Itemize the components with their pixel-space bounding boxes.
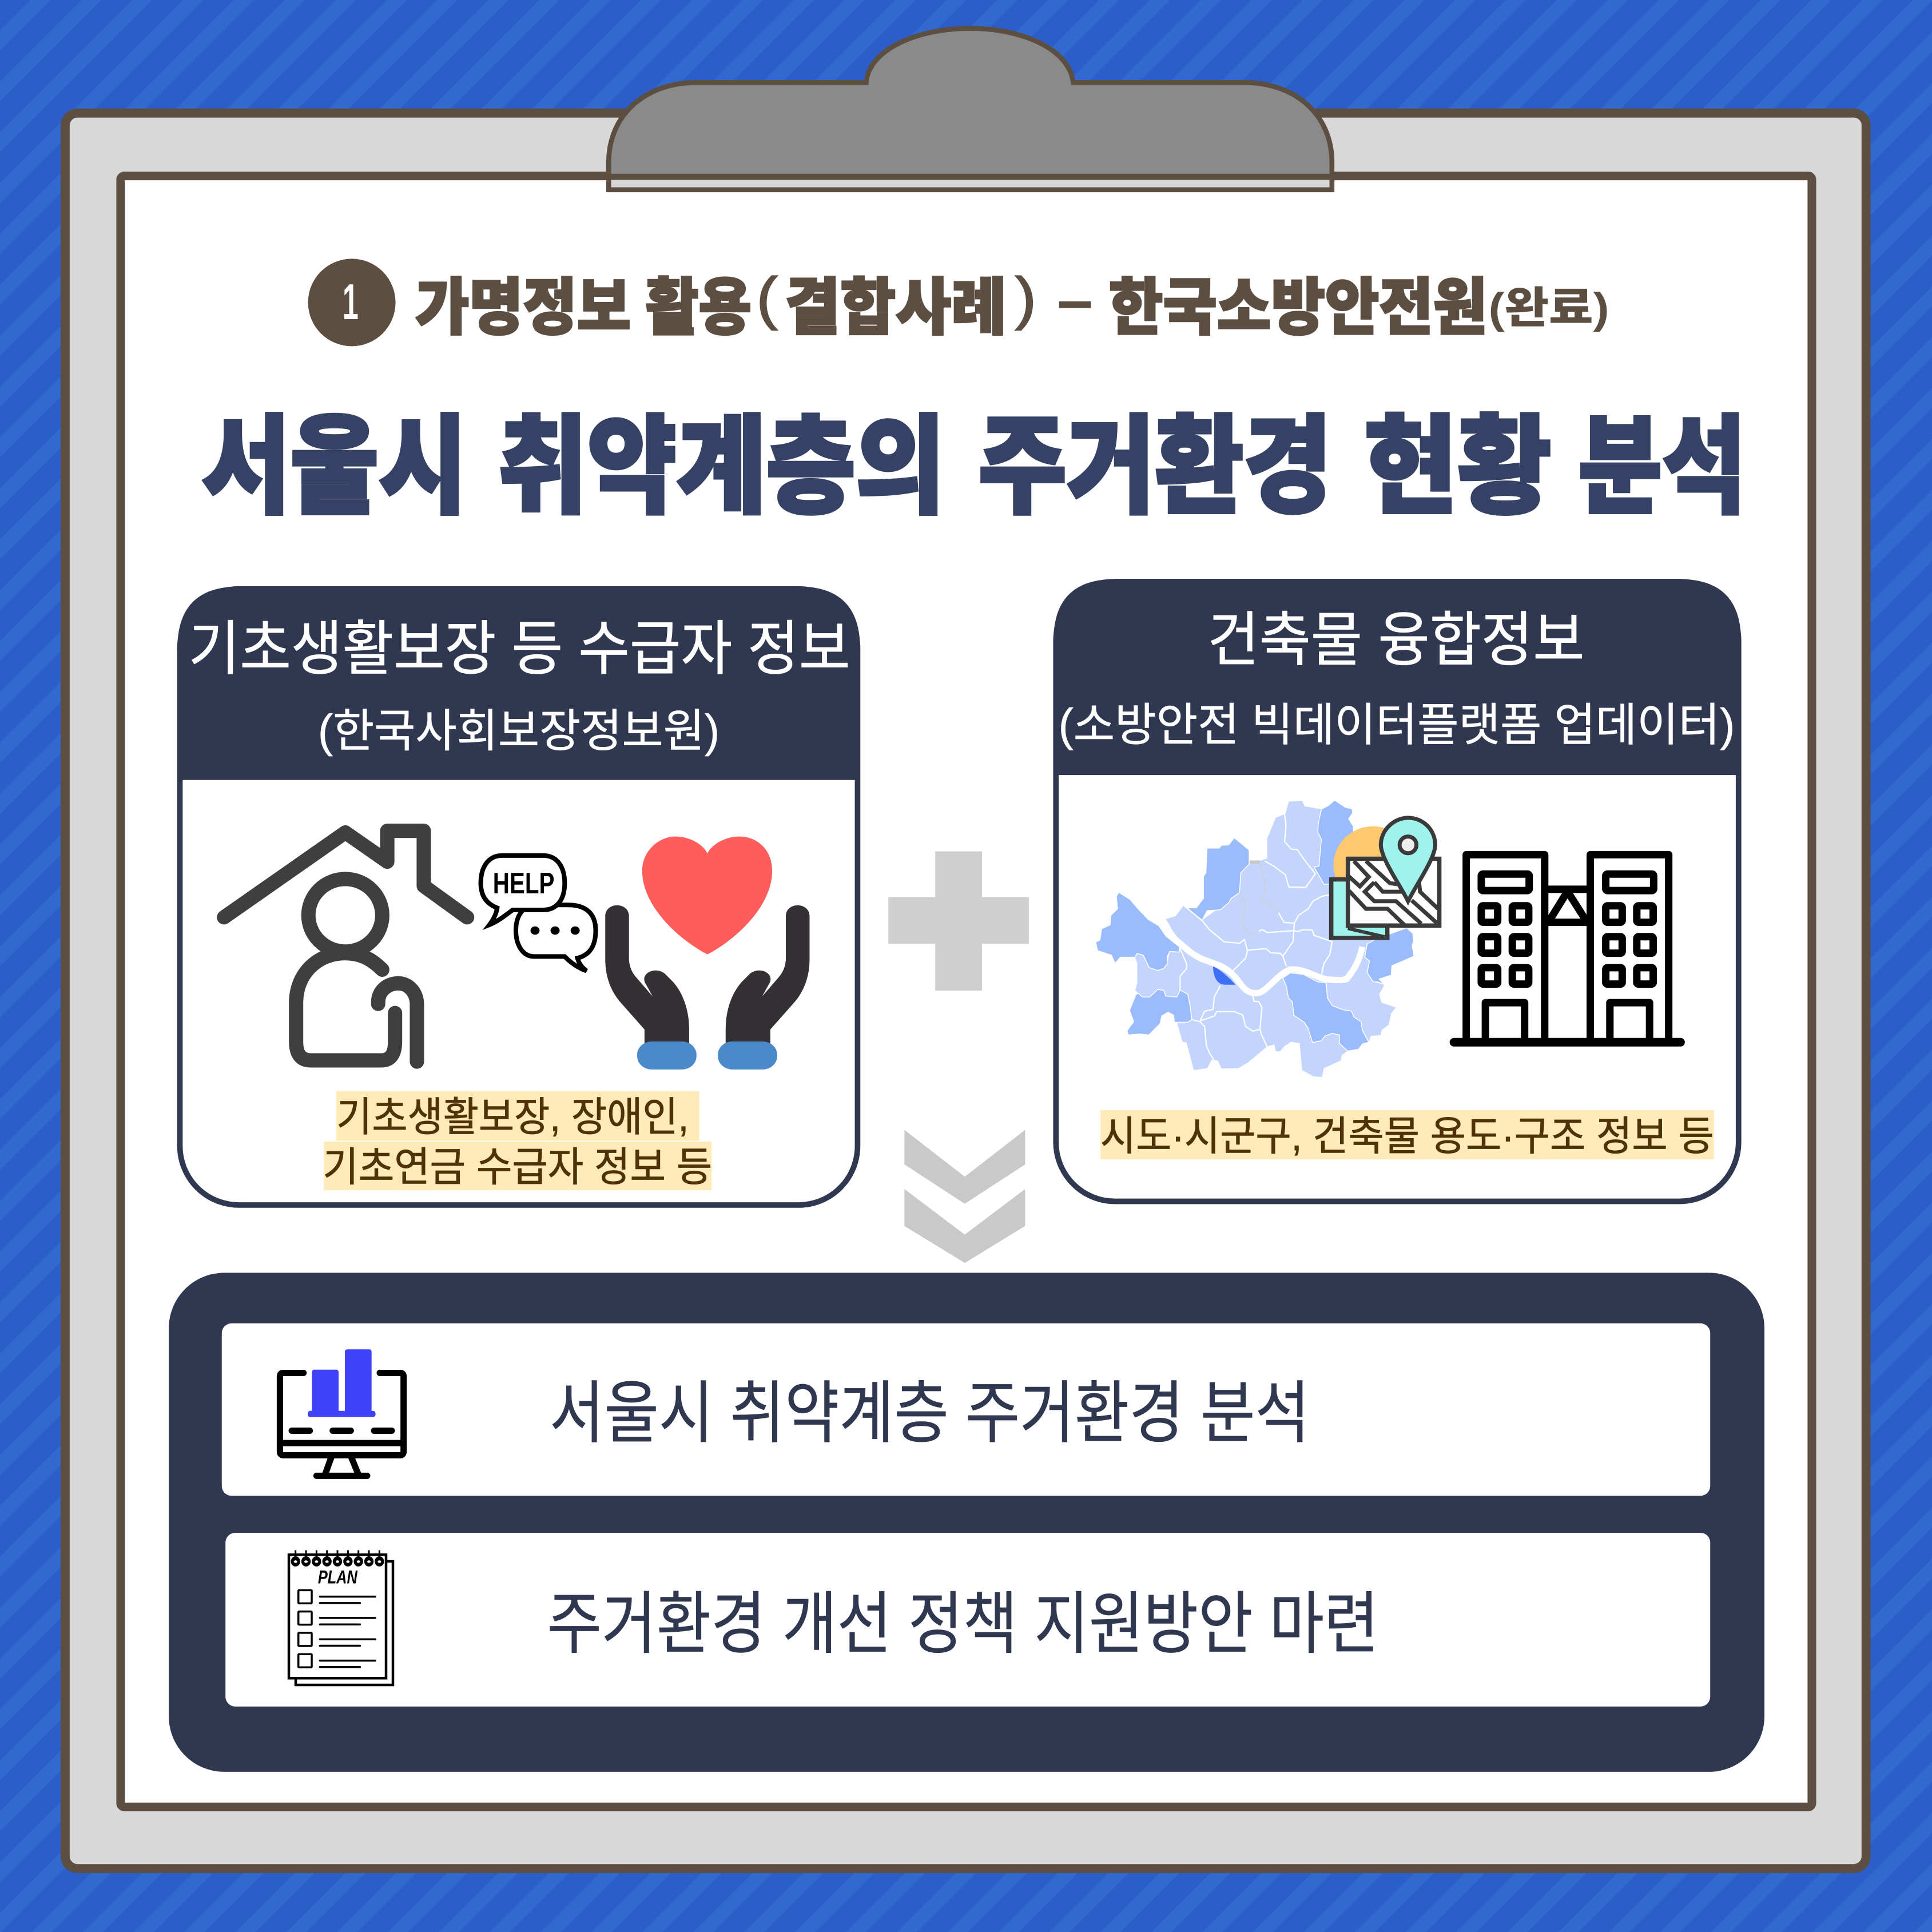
row text: 주거환경 개선 정책 지원방안 마련 [547, 1587, 1379, 1662]
main title: 취약계층의 [498, 407, 945, 527]
panel header [177, 586, 860, 780]
number badge [308, 259, 396, 346]
help label: HELP [493, 866, 554, 900]
arrow: double chevron down [904, 1130, 1025, 1263]
panel: basic livelihood recipients [177, 586, 860, 1205]
heading text [415, 266, 1487, 342]
highlighted description: 기초생활보장, 장애인, [336, 1095, 689, 1140]
main title: 주거환경 [979, 407, 1332, 527]
icon: monitor with bar chart [280, 1349, 404, 1476]
number badge: 1 [343, 273, 359, 330]
clipboard clip [609, 29, 1332, 190]
heading text: 활용 [646, 273, 752, 342]
highlighted description: 시도·시군구, 건축물 용도·구조 정보 등 [1100, 1114, 1714, 1159]
heading text: – [1059, 274, 1092, 329]
main title: 서울시 [202, 407, 467, 527]
section heading [308, 259, 1609, 346]
icon: elderly person in house [224, 831, 467, 1062]
icon: map pin [1331, 818, 1440, 938]
main title [202, 407, 1746, 527]
paper panel [121, 176, 1812, 1807]
heading text: 한국소방안전원 [1109, 273, 1487, 342]
map of Seoul [1096, 800, 1414, 1077]
panel heading text: 기초생활보장 등 수급자 정보 [189, 615, 850, 682]
heading status: (완료) [1488, 284, 1609, 332]
plan label: PLAN [318, 1567, 357, 1587]
panel source text: (한국사회보장정보원) [318, 706, 719, 757]
main title: 분석 [1579, 407, 1746, 527]
main title: 현황 [1364, 407, 1551, 527]
icon: hands holding heart [605, 837, 809, 1070]
panel: results [169, 1273, 1764, 1772]
row text: 서울시 취약계층 주거환경 분석 [550, 1376, 1310, 1452]
icon: speech bubbles [481, 856, 596, 971]
highlighted description [323, 1091, 712, 1190]
icon: buildings [1454, 854, 1680, 1042]
heading text: ) [1015, 266, 1036, 331]
panel heading text: 건축물 융합정보 [1207, 607, 1584, 673]
panel source text: (소방안전 빅데이터플랫폼 업데이터) [1059, 699, 1735, 750]
heading text: 가명정보 [415, 273, 631, 342]
highlighted description: 기초연금 수급자 정보 등 [323, 1145, 712, 1190]
heading text: ( [757, 266, 778, 331]
row: analysis [222, 1323, 1710, 1496]
row: policy [225, 1533, 1710, 1707]
icon: plus sign [888, 852, 1029, 991]
panel header [1054, 579, 1741, 775]
icon: plan notepad [289, 1551, 393, 1685]
heading text: 결합사례 [785, 273, 1007, 342]
panel: building information [1054, 579, 1741, 1201]
